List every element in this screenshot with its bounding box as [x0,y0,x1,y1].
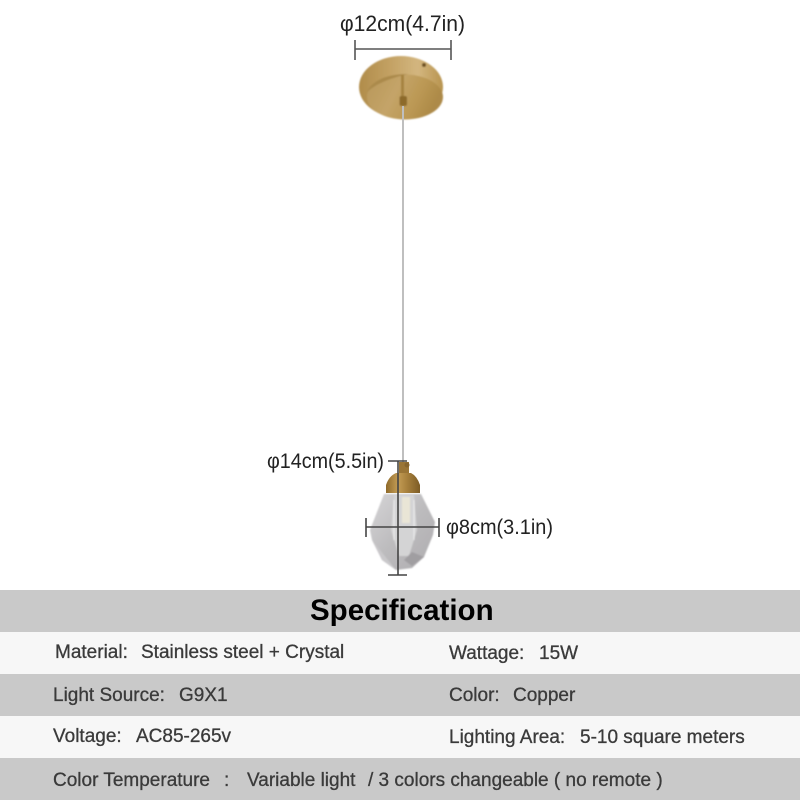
spec: lighting area: 5-10 square meters [580,727,745,748]
heading: Specification [310,594,494,627]
spec: material: Stainless steel + Crystal [141,642,344,663]
spec: color [449,685,576,706]
icon: brass ceiling canopy [359,56,443,120]
spec: wattage: 15W [539,643,578,664]
spec: color temperature: Color Temperature [53,770,210,791]
dimension line: canopy width [355,40,451,60]
label: overall drop: φ14cm(5.5in) [267,450,384,473]
spec: color temperature: / 3 colors changeable ( no remote ) [368,770,663,791]
spec: color temperature: Variable light [247,770,355,791]
spec: wattage: Wattage: [449,643,524,664]
panel: specification table [0,590,800,800]
label: canopy diameter: φ12cm(4.7in) [340,11,465,36]
spec: voltage [52,726,232,747]
spec: light source [53,685,228,706]
spec: color temperature: : [224,770,229,791]
spec: material: Material: [55,642,128,663]
diagram: pendant lamp with dimensions [267,11,553,576]
spec: light source: Light Source: [53,685,165,706]
label: shade diameter: φ8cm(3.1in) [446,516,553,539]
spec: color temperature [53,770,663,791]
icon: crystal lamp shade [370,494,435,570]
icon: brass lamp cap [386,462,420,493]
spec: color: Color: [449,685,500,706]
cord [402,106,404,465]
spec: voltage: Voltage: [53,726,122,747]
spec: light source: G9X1 [179,685,228,706]
spec: wattage [448,643,578,664]
spec: lighting area: Lighting Area: [449,727,565,748]
dimension lines: lamp height and width [366,461,439,575]
spec: color: Copper [513,685,575,706]
spec: voltage: AC85-265v [136,726,231,747]
spec: lighting area [449,727,745,748]
